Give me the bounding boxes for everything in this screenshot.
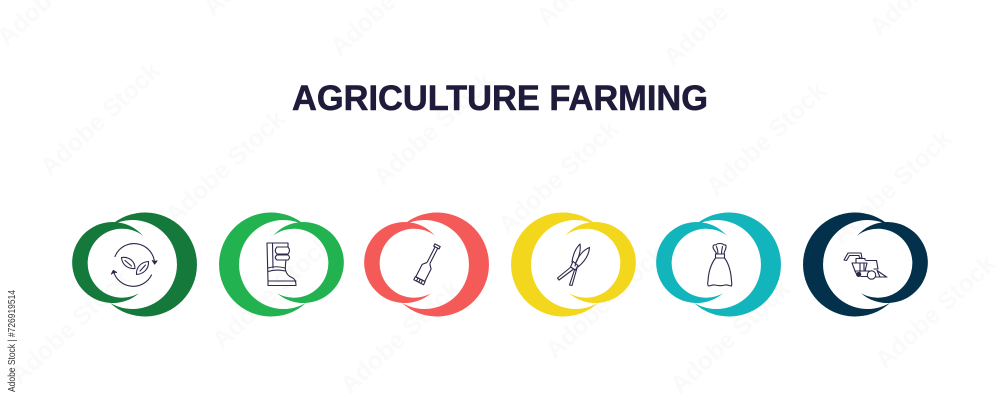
watermark pattern: Adobe Stock: [701, 77, 832, 201]
watermark pattern: Adobe Stock: [35, 57, 166, 181]
watermark pattern: Adobe Stock: [826, 125, 957, 249]
ring: yellow: [511, 212, 636, 316]
watermark pattern: Adobe Stock: [665, 275, 796, 399]
ring: teal: [656, 212, 781, 316]
icon: harvester: [844, 253, 887, 279]
ring: green: [219, 212, 344, 316]
ring: navy: [803, 212, 928, 316]
title: AGRICULTURE FARMING: [292, 79, 708, 118]
watermark pattern: Adobe Stock: [870, 250, 1000, 374]
watermark pattern: Adobe Stock: [540, 240, 671, 364]
icon: spade: [414, 243, 442, 285]
ring: coral: [364, 212, 489, 316]
icon: pruning shears: [558, 244, 590, 286]
watermark pattern: Adobe Stock: [335, 275, 466, 399]
icon: boot: [267, 243, 296, 286]
watermark pattern: Adobe Stock: [493, 115, 624, 239]
watermark pattern: Adobe Stock: [160, 105, 291, 229]
watermark pattern: Adobe Stock: [207, 230, 338, 354]
watermark pattern: Adobe Stock: [5, 265, 136, 389]
ring: dark green: [72, 212, 197, 316]
watermark pattern: Adobe Stock: [368, 67, 499, 191]
icon: leaf cycle: [112, 244, 157, 286]
stock id label: Adobe Stock | #726919514: [6, 290, 18, 392]
watermark pattern: Adobe: [658, 0, 734, 71]
icon: grain sack: [708, 244, 732, 286]
